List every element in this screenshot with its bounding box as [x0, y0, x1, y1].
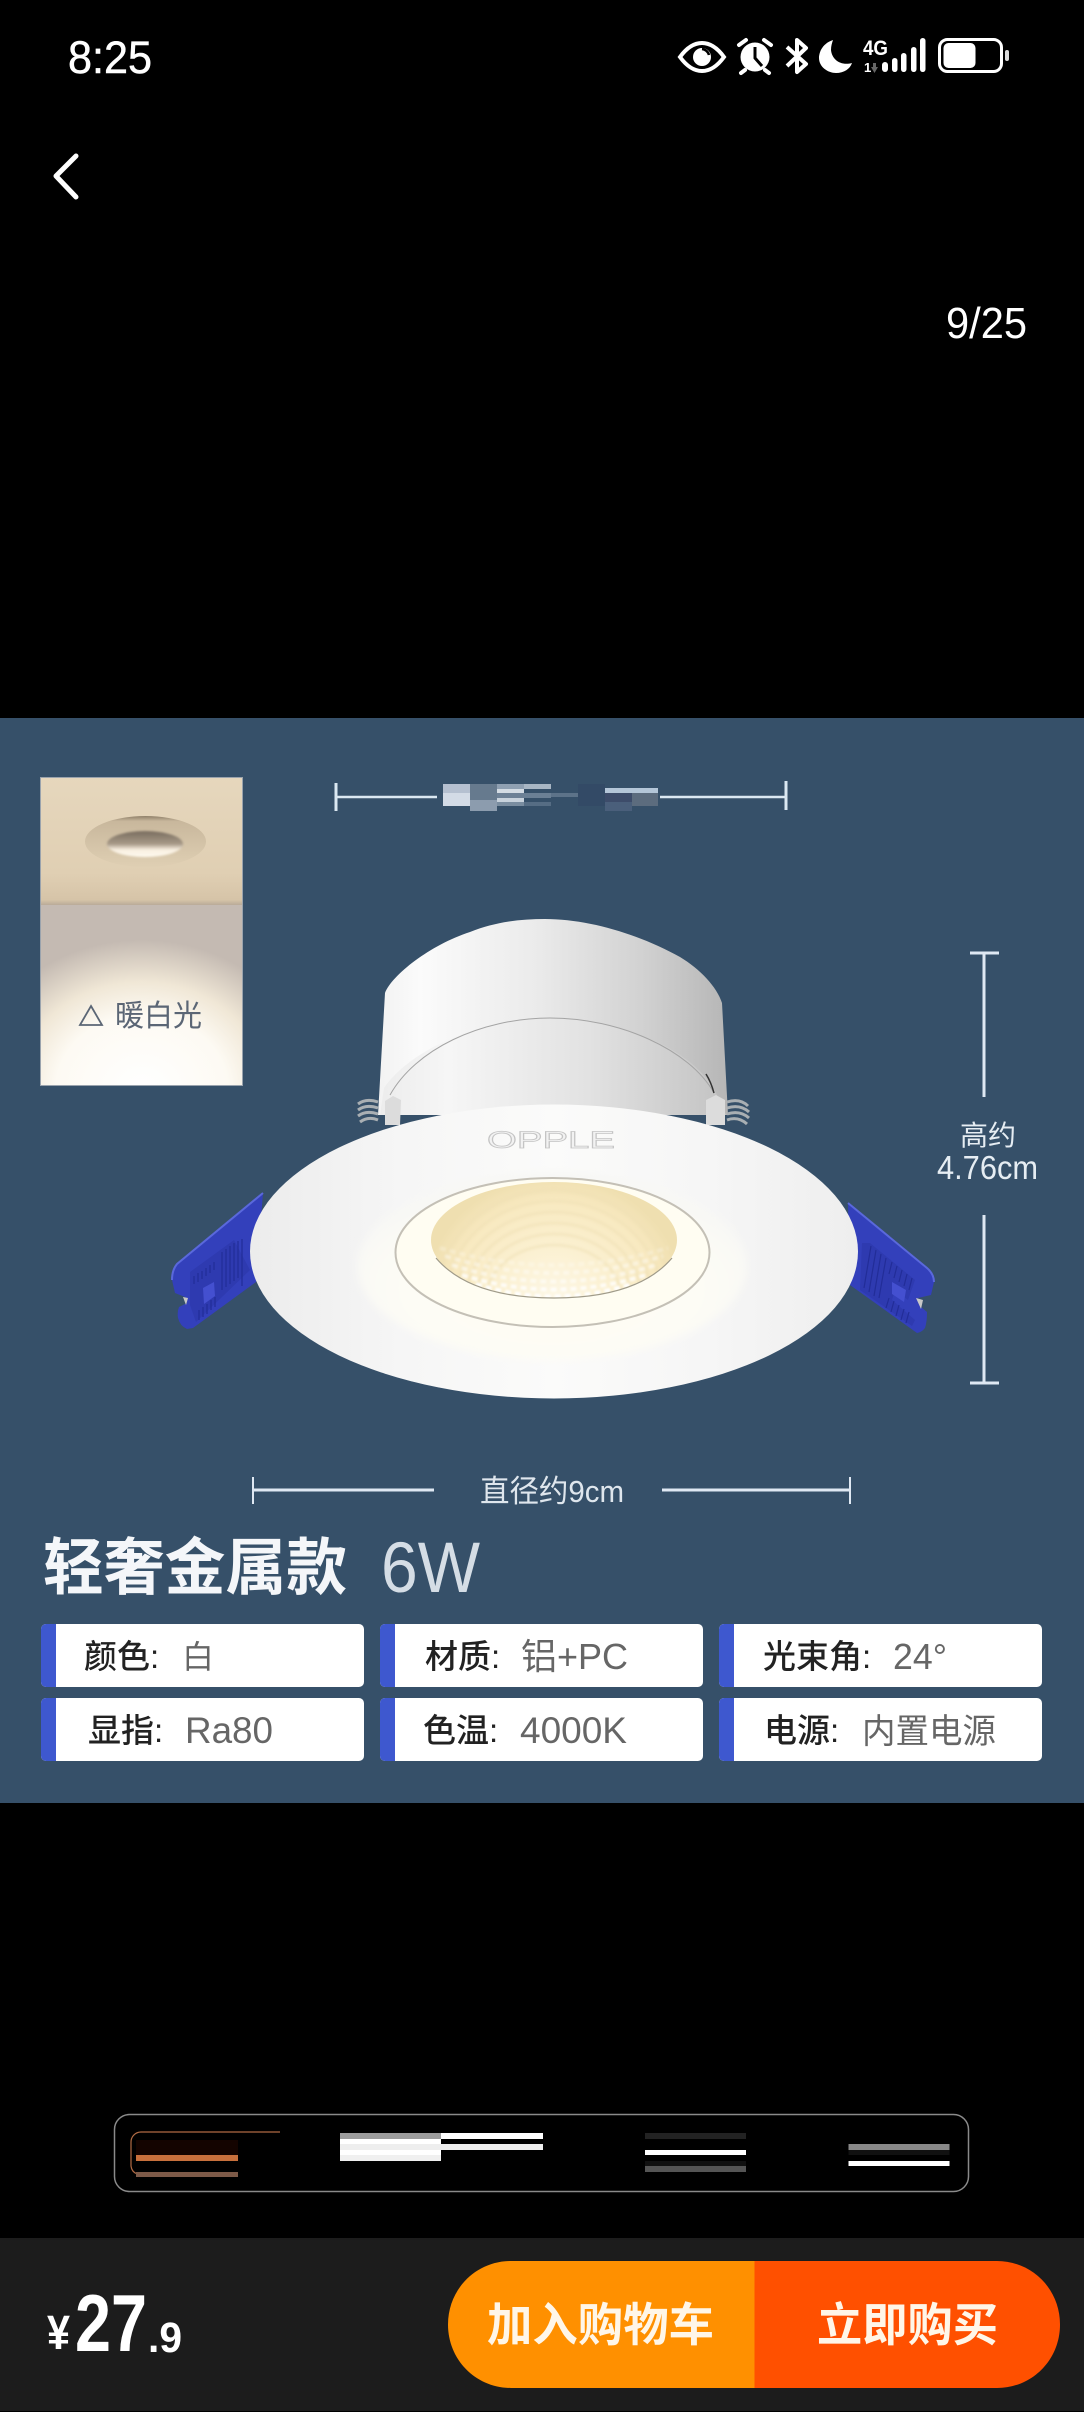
- spec card: material: 铝+PC: [521, 1636, 628, 1677]
- button: buy now: 立即购买: [817, 2299, 998, 2351]
- icon: alarm clock: [739, 40, 771, 73]
- title: 6W: [381, 1529, 480, 1608]
- button: add to cart: [448, 2261, 754, 2388]
- dimension line lower: [970, 1215, 999, 1383]
- spec card: colour temperature: 色温:: [423, 1712, 498, 1749]
- logo: OPPLE: [487, 1127, 615, 1154]
- spec card: colour: [41, 1624, 364, 1687]
- spec card: beam angle: [719, 1624, 1042, 1687]
- spec card: beam angle: 24°: [893, 1636, 947, 1677]
- icon: eye: [680, 43, 724, 71]
- dimension: diameter: 直径约9cm: [480, 1474, 624, 1509]
- thumbnail 2: [340, 2133, 543, 2161]
- button: buy now: [754, 2261, 1060, 2388]
- clock: 8:25: [68, 32, 152, 83]
- spec card: colour: 颜色:: [84, 1638, 159, 1675]
- thumbnail 4: [848, 2144, 950, 2166]
- back arrow: [56, 156, 76, 197]
- flange: [250, 1104, 858, 1398]
- price: ¥: [47, 2307, 70, 2360]
- thumbnail caption: 暖白光: [115, 1000, 202, 1033]
- dimension label: [937, 1120, 1038, 1186]
- spec card: beam angle: 光束角:: [763, 1638, 871, 1675]
- metal ring: [396, 1178, 710, 1327]
- inner soft bezel: [357, 1172, 747, 1360]
- spec card: colour rendering: 显指:: [88, 1712, 163, 1749]
- price: .9: [148, 2314, 182, 2362]
- product: downlight: [172, 919, 934, 1410]
- spec card: material: 材质:: [425, 1638, 500, 1675]
- icon: signal bars: [882, 38, 926, 72]
- thumbnail strip: [114, 2114, 968, 2192]
- price: 27: [75, 2279, 147, 2369]
- icon: bluetooth: [787, 40, 806, 72]
- spec card: power supply: 内置电源: [862, 1713, 996, 1751]
- price: [47, 2279, 182, 2369]
- network label: [863, 37, 888, 75]
- image counter: 9/25: [946, 299, 1027, 348]
- title: 轻奢金属款: [43, 1534, 347, 1603]
- can body: [378, 919, 728, 1115]
- spec card: colour rendering: [41, 1698, 364, 1761]
- icon: battery: [940, 40, 1009, 72]
- thumbnail 3: [645, 2133, 746, 2172]
- spec card: colour rendering: Ra80: [185, 1710, 273, 1751]
- spec card: colour: 白: [182, 1639, 214, 1675]
- reflector: [431, 1182, 677, 1299]
- dimension label: 高约: [960, 1120, 1016, 1151]
- button: add to cart: 加入购物车: [487, 2299, 714, 2351]
- network label: 4G: [863, 37, 888, 60]
- dimension line upper: [970, 953, 999, 1097]
- selected thumbnail: [131, 2132, 280, 2177]
- bottom bar: [0, 2238, 1084, 2411]
- thumbnail: warm white light: [40, 777, 243, 1086]
- springs: [358, 1100, 749, 1124]
- mounting tabs: [385, 1095, 725, 1125]
- clip: right blue spring clip: [848, 1203, 934, 1333]
- dimension: top width (pixelated label): [336, 781, 786, 811]
- swivel band: [380, 1018, 726, 1115]
- network label: 1: [864, 60, 871, 75]
- status bar: [68, 32, 1009, 83]
- dimension: height: [937, 953, 1038, 1383]
- icon: moon: [819, 40, 852, 73]
- spec card: colour temperature: [380, 1698, 703, 1761]
- clip: left blue spring clip: [172, 1193, 263, 1329]
- dimension label: 4.76cm: [937, 1149, 1038, 1186]
- spec card: power supply: [719, 1698, 1042, 1761]
- spec card: power supply: 电源:: [764, 1712, 839, 1749]
- thumbnail caption: [80, 1000, 202, 1033]
- title: [43, 1529, 480, 1608]
- panel: product image: [0, 718, 1084, 1803]
- spec card: colour temperature: 4000K: [520, 1710, 627, 1751]
- spec card: material: [380, 1624, 703, 1687]
